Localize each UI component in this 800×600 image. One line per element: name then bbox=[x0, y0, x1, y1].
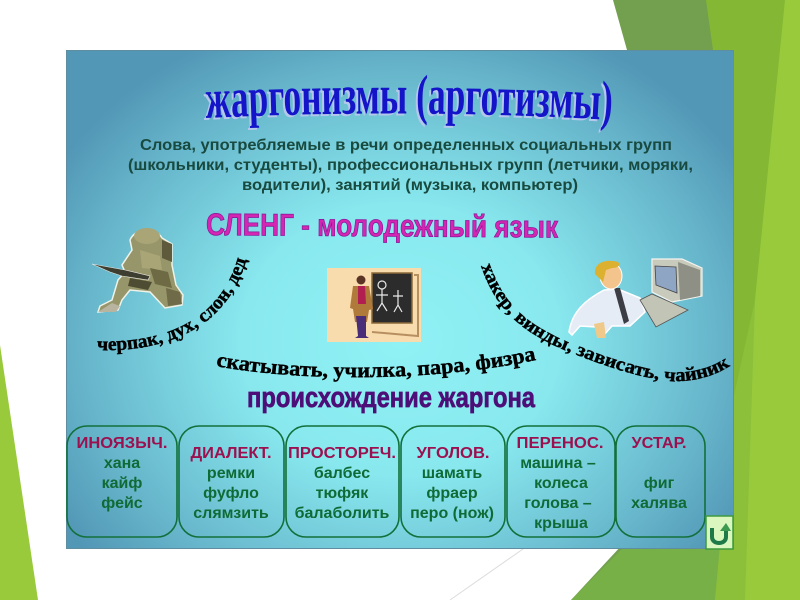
box: criminal: перо (нож) bbox=[410, 505, 494, 522]
box: criminal bbox=[401, 426, 505, 537]
box: transferred: ПЕРЕНОС. bbox=[516, 435, 604, 452]
subtitle: slang: СЛЕНГ - молодежный язык bbox=[206, 207, 559, 244]
box: colloquial: балбес bbox=[314, 465, 370, 482]
box: criminal: фраер bbox=[426, 485, 478, 502]
title: жаргонизмы (арготизмы) bbox=[206, 74, 612, 132]
box: foreign origin bbox=[67, 426, 177, 537]
box: colloquial: ПРОСТОРЕЧ. bbox=[288, 445, 396, 462]
box: dialect: фуфло bbox=[203, 485, 259, 502]
box: criminal: шамать bbox=[422, 465, 482, 482]
box: dialect: ремки bbox=[207, 465, 255, 482]
box: transferred: машина – bbox=[520, 455, 596, 472]
box: colloquial: балаболить bbox=[295, 505, 390, 522]
box: foreign origin: фейс bbox=[101, 495, 143, 512]
thin decorative line bbox=[450, 549, 523, 600]
box: obsolete: УСТАР. bbox=[632, 435, 686, 452]
box: colloquial bbox=[286, 426, 399, 537]
box: transferred: колеса bbox=[534, 475, 588, 492]
box: dialect: ДИАЛЕКТ. bbox=[190, 445, 272, 462]
green decoration: bottom left bbox=[0, 345, 38, 600]
box: foreign origin: ИНОЯЗЫЧ. bbox=[76, 435, 168, 452]
box: dialect: слямзить bbox=[193, 505, 269, 522]
box: foreign origin: хана bbox=[104, 455, 140, 472]
box: transferred: голова – bbox=[524, 495, 592, 512]
box: dialect bbox=[179, 426, 284, 537]
main slide panel bbox=[66, 50, 734, 550]
icon: soldier bbox=[92, 228, 183, 312]
description text: Слова, употребляемые в речи определенных социальных групп bbox=[140, 137, 672, 154]
box: criminal: УГОЛОВ. bbox=[416, 445, 490, 462]
icon: man with computer bbox=[569, 259, 702, 338]
description text: водители), занятий (музыка, компьютер) bbox=[242, 177, 578, 194]
box: transferred: крыша bbox=[534, 515, 588, 532]
description text: (школьники, студенты), профессиональных групп (летчики, моряки, bbox=[128, 157, 693, 174]
picture: teacher at blackboard bbox=[327, 268, 421, 342]
curved text: army slang: черпак, дух, слон, дед bbox=[97, 257, 250, 354]
box: obsolete: фиг bbox=[644, 475, 675, 492]
curved text: computer slang: хакер, винды, зависать, чайник bbox=[480, 263, 730, 382]
curved text: school slang: скатывать, училка, пара, физра bbox=[217, 350, 536, 382]
box: obsolete bbox=[616, 426, 705, 537]
box: foreign origin: кайф bbox=[102, 475, 142, 492]
heading: origin of jargon: происхождение жаргона bbox=[247, 382, 536, 414]
green decoration: top right bbox=[571, 0, 800, 600]
box: transferred bbox=[507, 426, 615, 537]
box: colloquial: тюфяк bbox=[316, 485, 369, 502]
title: жаргонизмы (арготизмы) bbox=[204, 78, 607, 134]
description text bbox=[128, 137, 693, 194]
box: obsolete: халява bbox=[631, 495, 687, 512]
icon: return button bbox=[706, 516, 733, 549]
